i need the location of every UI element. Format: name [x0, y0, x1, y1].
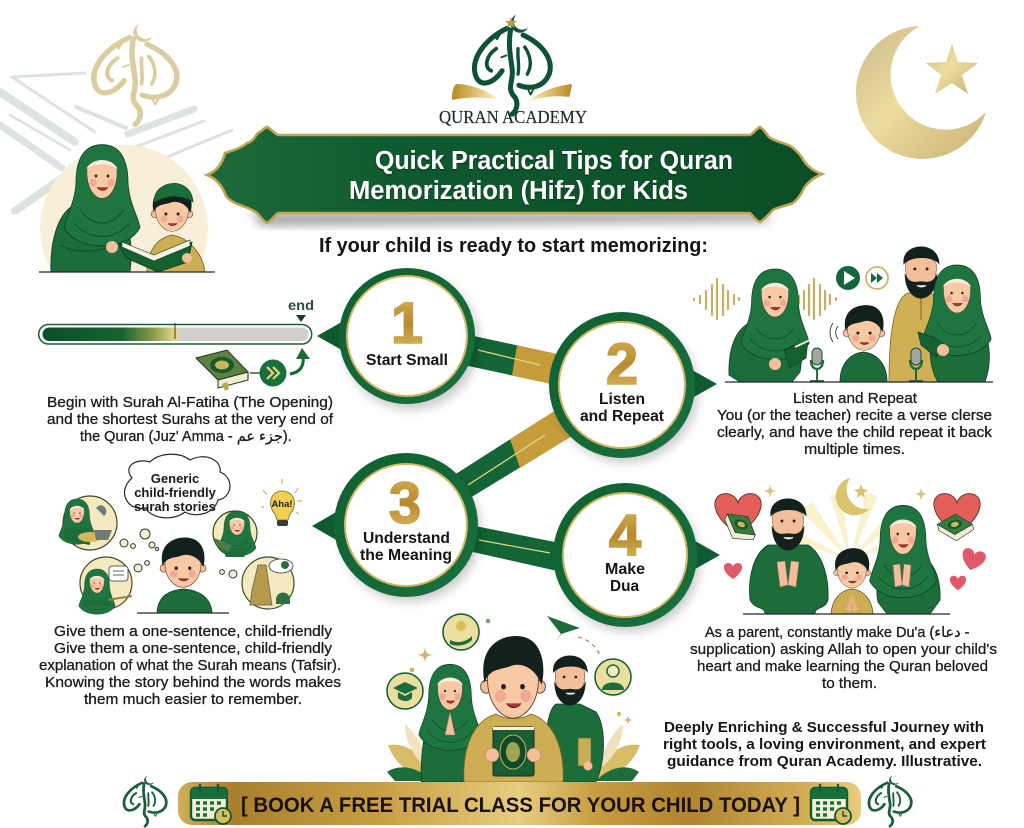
bar background: [178, 782, 861, 825]
text: listen and repeat: You (or the teacher) recite a verse clerse: [717, 408, 992, 424]
microphone right: [909, 348, 923, 382]
step 2: listen and repeat: [549, 312, 717, 463]
illustration: family making dua: [715, 478, 987, 614]
text: start small: [47, 395, 334, 445]
small hearts: [724, 547, 987, 590]
heart with quran right: [934, 494, 980, 544]
text: understand the meaning: [39, 624, 341, 708]
step 4 shadow: [558, 490, 700, 632]
right woman with book: [918, 265, 991, 382]
step 3 shadow: [339, 460, 481, 602]
connector 3 to 4: [455, 523, 575, 575]
panel: title banner: [207, 127, 822, 226]
step 3: understand the meaning: [312, 453, 481, 602]
text: make dua: heart and make learning the Quran beloved: [697, 659, 988, 675]
microphone left: [810, 348, 824, 382]
text: understand the meaning: Give them a one-sentence, child-friendly: [54, 624, 333, 640]
child: [464, 636, 563, 782]
step 4 label: Make: [605, 561, 645, 578]
icon: calendar right: [811, 785, 851, 824]
boy: [831, 548, 873, 614]
illustration: family listening: [694, 247, 993, 382]
step 3 ring: [312, 453, 478, 597]
gold and green leaves: [387, 724, 640, 781]
thought cloud: surah stories: [134, 499, 216, 514]
step 2 number: 2: [606, 332, 638, 397]
step 3 label: Understand: [363, 530, 450, 547]
step 4 number: 4: [609, 503, 641, 568]
illustration: happy child with quran and parents: [387, 614, 640, 782]
text: start small: the Quran (Juz' Amma - جزء عم).: [80, 429, 292, 445]
light rays: [775, 492, 925, 560]
small logo left: [124, 776, 166, 826]
step 2 label: Listen: [599, 391, 645, 408]
step 1 label: Start Small: [366, 352, 448, 369]
illustration: mother and son reading: [39, 145, 215, 272]
idea bulb: [261, 479, 302, 526]
cream backdrop: [40, 145, 208, 272]
icon: paper plane with dashes: [547, 616, 600, 655]
illustration: child thinking of stories: [59, 454, 302, 614]
text: closing message: Deeply Enriching & Successful Journey with: [664, 720, 984, 736]
connectors between steps: [440, 333, 590, 575]
step 2 ring: [549, 312, 717, 458]
icon: graduation cap: [387, 673, 423, 709]
mother: [419, 664, 481, 782]
story circle 2: [79, 557, 132, 614]
step 3 label: the Meaning: [360, 547, 452, 564]
text: make dua: As a parent, constantly make Du'a (دعاء -: [705, 625, 970, 641]
idea bulb: Aha!: [271, 499, 293, 510]
ground line: [725, 381, 993, 383]
sound waves: [694, 279, 836, 319]
icon: quran book: [196, 350, 248, 391]
text: closing message: [663, 720, 986, 770]
connector 1 to 2: [450, 333, 575, 388]
mother: [51, 145, 140, 272]
step 4: make dua: [553, 483, 720, 632]
step 1: start small: [317, 268, 479, 410]
ground line: [743, 613, 950, 615]
step 2 label: and Repeat: [580, 408, 665, 425]
story circle 1: [59, 496, 117, 550]
panel: start small graphic: [39, 297, 314, 391]
step 3 number: 3: [389, 471, 421, 536]
crescent and star: [836, 478, 869, 515]
icon: teacher: [595, 659, 631, 695]
banner shape: [207, 127, 822, 223]
call to action bar: [178, 782, 861, 825]
story circle 4: [242, 557, 294, 609]
step 1 ring: [317, 268, 475, 404]
watermark: open book: [0, 73, 232, 211]
step 2 label: [580, 391, 665, 425]
text: listen and repeat: clearly, and have the child repeat it back: [717, 425, 993, 441]
text: make dua: to them.: [822, 676, 877, 692]
step 3 label: [360, 530, 452, 564]
father: [889, 247, 945, 382]
heart with quran left: [715, 494, 761, 546]
mother: [870, 505, 940, 614]
icon: forward button: [250, 360, 286, 386]
thought cloud: [125, 454, 230, 518]
text: listen and repeat: [717, 391, 993, 458]
thought cloud: child-friendly: [134, 485, 217, 500]
text: understand the meaning: Give them a one-sentence, child-friendly: [54, 641, 333, 657]
arrow: up to end: [290, 348, 310, 374]
father: [750, 499, 828, 614]
text: start small: and the shortest Surahs at the very end of: [47, 412, 334, 428]
sparkles: [763, 484, 928, 501]
end label: end: [288, 297, 314, 313]
quran held by child: [485, 727, 541, 776]
academy logo: [439, 15, 587, 127]
title text: Quick Practical Tips for Quran: [375, 147, 733, 175]
small logo right: [869, 776, 911, 826]
progress bar: [39, 323, 312, 344]
son: [147, 183, 205, 272]
text: understand the meaning: explanation of what the Surah means (Tafsir).: [39, 658, 341, 674]
step 2 shadow: [554, 319, 698, 463]
text: make dua: supplication) asking Allah to open your child's: [690, 642, 997, 658]
star: [505, 17, 517, 28]
story circle 3: [213, 511, 257, 557]
step 4 label: [605, 561, 645, 595]
text: start small: Begin with Surah Al-Fatiha (The Opening): [47, 395, 333, 411]
text: understand the meaning: them much easier to remember.: [84, 692, 302, 708]
sparkles: [410, 619, 633, 725]
icon: calendar left: [191, 785, 231, 824]
boy: [830, 305, 887, 382]
text: listen and repeat: Listen and Repeat: [793, 391, 917, 407]
step 1 number: 1: [391, 291, 423, 356]
father: [546, 655, 604, 782]
watermark logo: [94, 24, 177, 124]
text: make dua: [690, 625, 997, 692]
title text: Memorization (Hifz) for Kids: [349, 177, 688, 205]
call to action text: [ BOOK A FREE TRIAL CLASS FOR YOUR CHILD TODAY ]: [241, 794, 800, 817]
boy: [157, 538, 212, 613]
ground line: [39, 271, 215, 273]
title text: [349, 147, 733, 205]
left woman with book: [729, 269, 810, 382]
open book: [106, 240, 192, 272]
ground line: [137, 612, 229, 614]
icon: hand and bulb: [443, 614, 479, 650]
text: listen and repeat: multiple times.: [804, 442, 905, 458]
text: closing message: right tools, a loving environment, and expert: [663, 737, 986, 753]
thought cloud: Generic: [151, 471, 199, 486]
logo swooshes: [452, 84, 498, 100]
connector 2 to 3: [440, 398, 590, 507]
text: closing message: guidance from Quran Academy. Illustrative.: [667, 754, 982, 770]
logo wordmark: QURAN ACADEMY: [439, 107, 587, 127]
play button: [836, 266, 860, 290]
step 1 shadow: [343, 274, 479, 410]
crescent and star: [856, 26, 986, 159]
calligraphy mark: [474, 15, 550, 114]
fast-forward button: [866, 267, 888, 289]
step 4 label: Dua: [610, 578, 639, 595]
text: understand the meaning: Knowing the story behind the words makes: [45, 675, 341, 691]
step 4 ring: [553, 483, 720, 627]
banner shadow: [250, 212, 770, 226]
thought bubbles: [120, 529, 237, 578]
subheading: If your child is ready to start memorizing:: [319, 235, 708, 257]
end label: [288, 297, 314, 322]
